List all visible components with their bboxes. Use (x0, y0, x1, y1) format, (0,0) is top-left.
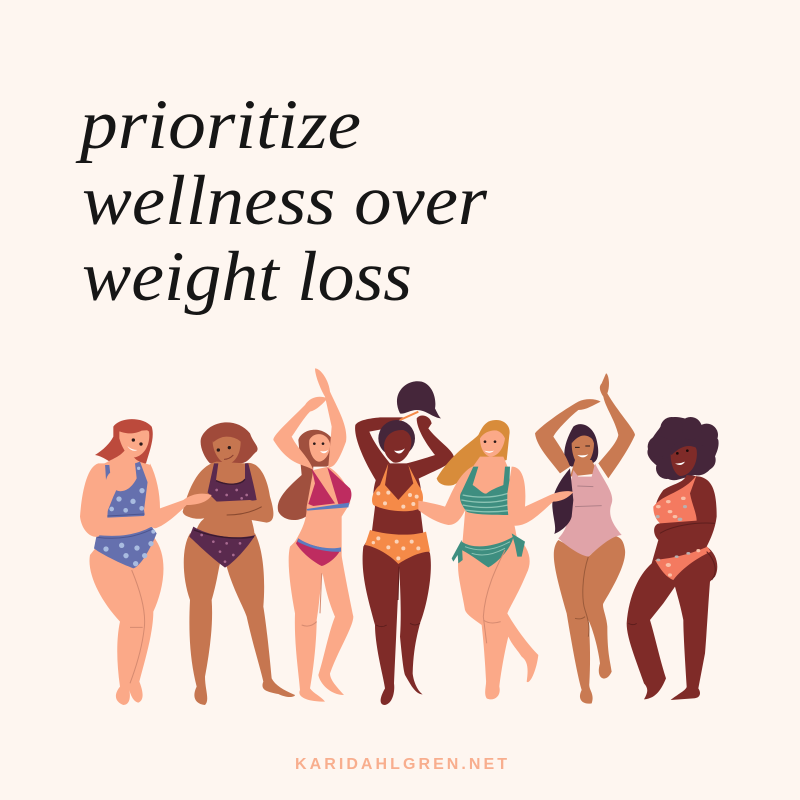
figure: woman in coral bikini with curly hair (627, 417, 719, 700)
title: prioritize (75, 86, 361, 164)
figure: woman in orange bikini tying her hair (355, 381, 454, 705)
hair bun (397, 381, 442, 418)
figure: woman in pink one-piece with long dark hair (535, 373, 635, 704)
title: weight loss (82, 238, 412, 316)
footer website credit: KARIDAHLGREN.NET (295, 756, 507, 773)
figure: woman in green striped bikini (418, 420, 573, 699)
figure: woman in magenta bikini with raised arms (273, 368, 353, 702)
title (75, 86, 487, 316)
figure: woman in purple bikini with crossed arms (183, 422, 295, 705)
figure: woman in blue polka-dot bikini (80, 419, 212, 705)
title: wellness over (82, 162, 487, 240)
